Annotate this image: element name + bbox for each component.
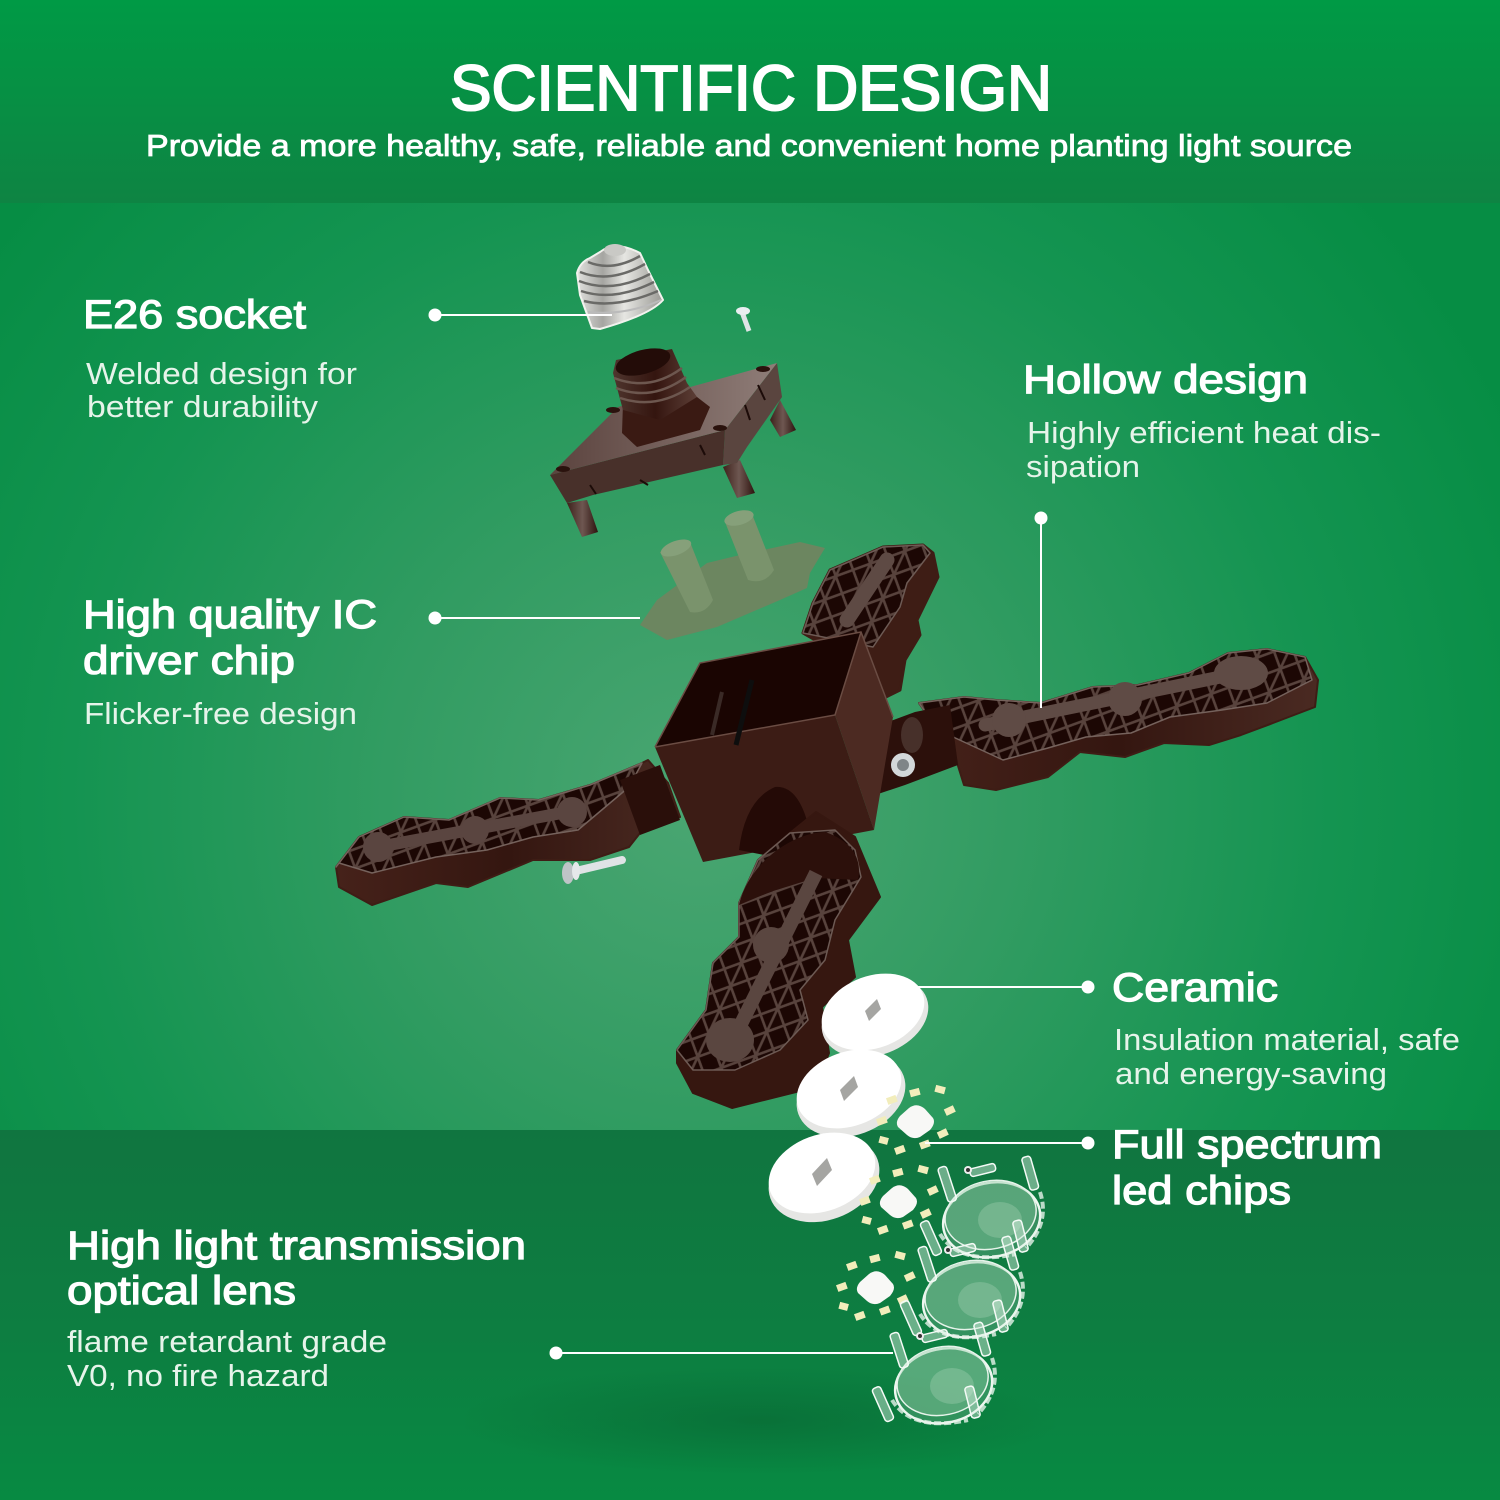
- label: Ceramic: Ceramic: [1112, 966, 1278, 1010]
- label: Full spectrum led chips: Full spectrum: [1112, 1123, 1382, 1167]
- label: optical lens: High light transmission: [67, 1224, 526, 1268]
- label: Hollow design: sipation: [1026, 449, 1140, 484]
- pointer: hollow: [1034, 512, 1048, 708]
- back plate with threaded neck: [550, 343, 796, 537]
- front arm: [677, 812, 880, 1108]
- label: optical lens: optical lens: [67, 1269, 296, 1313]
- label: IC driver chip: driver chip: [83, 639, 295, 683]
- label: IC driver chip: [83, 593, 377, 731]
- right arm: [919, 649, 1318, 790]
- small screw: [736, 307, 750, 331]
- right hinge with bolt: [875, 705, 958, 795]
- title: SCIENTIFIC DESIGN: [450, 52, 1052, 124]
- label: optical lens: V0, no fire hazard: [67, 1358, 329, 1393]
- label: Full spectrum led chips: [1112, 1123, 1382, 1213]
- label: E26 socket: Welded design for: [86, 356, 357, 391]
- label: E26 socket: better durability: [87, 389, 319, 424]
- label: E26 socket: E26 socket: [83, 293, 306, 337]
- pointer: socket: [428, 308, 612, 322]
- subtitle: Provide a more healthy, safe, reliable and convenient home planting light source: [146, 128, 1352, 163]
- label: Hollow design: Highly efficient heat dis-: [1027, 415, 1381, 450]
- label: Hollow design: Hollow design: [1023, 358, 1308, 402]
- LED chip clusters: [836, 1085, 956, 1321]
- central box: [655, 632, 893, 862]
- pointer: chip: [428, 612, 640, 624]
- green driver board: [640, 507, 825, 640]
- pointer: led chips: [925, 1136, 1094, 1150]
- label: E26 socket: [83, 293, 357, 424]
- label: optical lens: flame retardant grade: [67, 1324, 387, 1359]
- label: IC driver chip: Flicker-free design: [84, 696, 357, 731]
- back arm: [803, 545, 938, 700]
- left arm: [336, 760, 680, 905]
- pointer: lens: [550, 1346, 893, 1360]
- E26 metal socket: [577, 244, 663, 329]
- label: Ceramic: and energy-saving: [1115, 1056, 1387, 1091]
- optical lenses: [872, 1156, 1047, 1432]
- label: Hollow design: [1023, 358, 1381, 484]
- label: IC driver chip: High quality IC: [83, 593, 377, 637]
- pointer: ceramic: [905, 980, 1094, 994]
- screw: bottom left: [562, 860, 622, 884]
- label: Ceramic: [1112, 966, 1460, 1091]
- label: Full spectrum led chips: led chips: [1112, 1169, 1291, 1213]
- label: Ceramic: Insulation material, safe: [1114, 1022, 1460, 1057]
- label: optical lens: [67, 1224, 526, 1393]
- ceramic disks: [756, 960, 940, 1237]
